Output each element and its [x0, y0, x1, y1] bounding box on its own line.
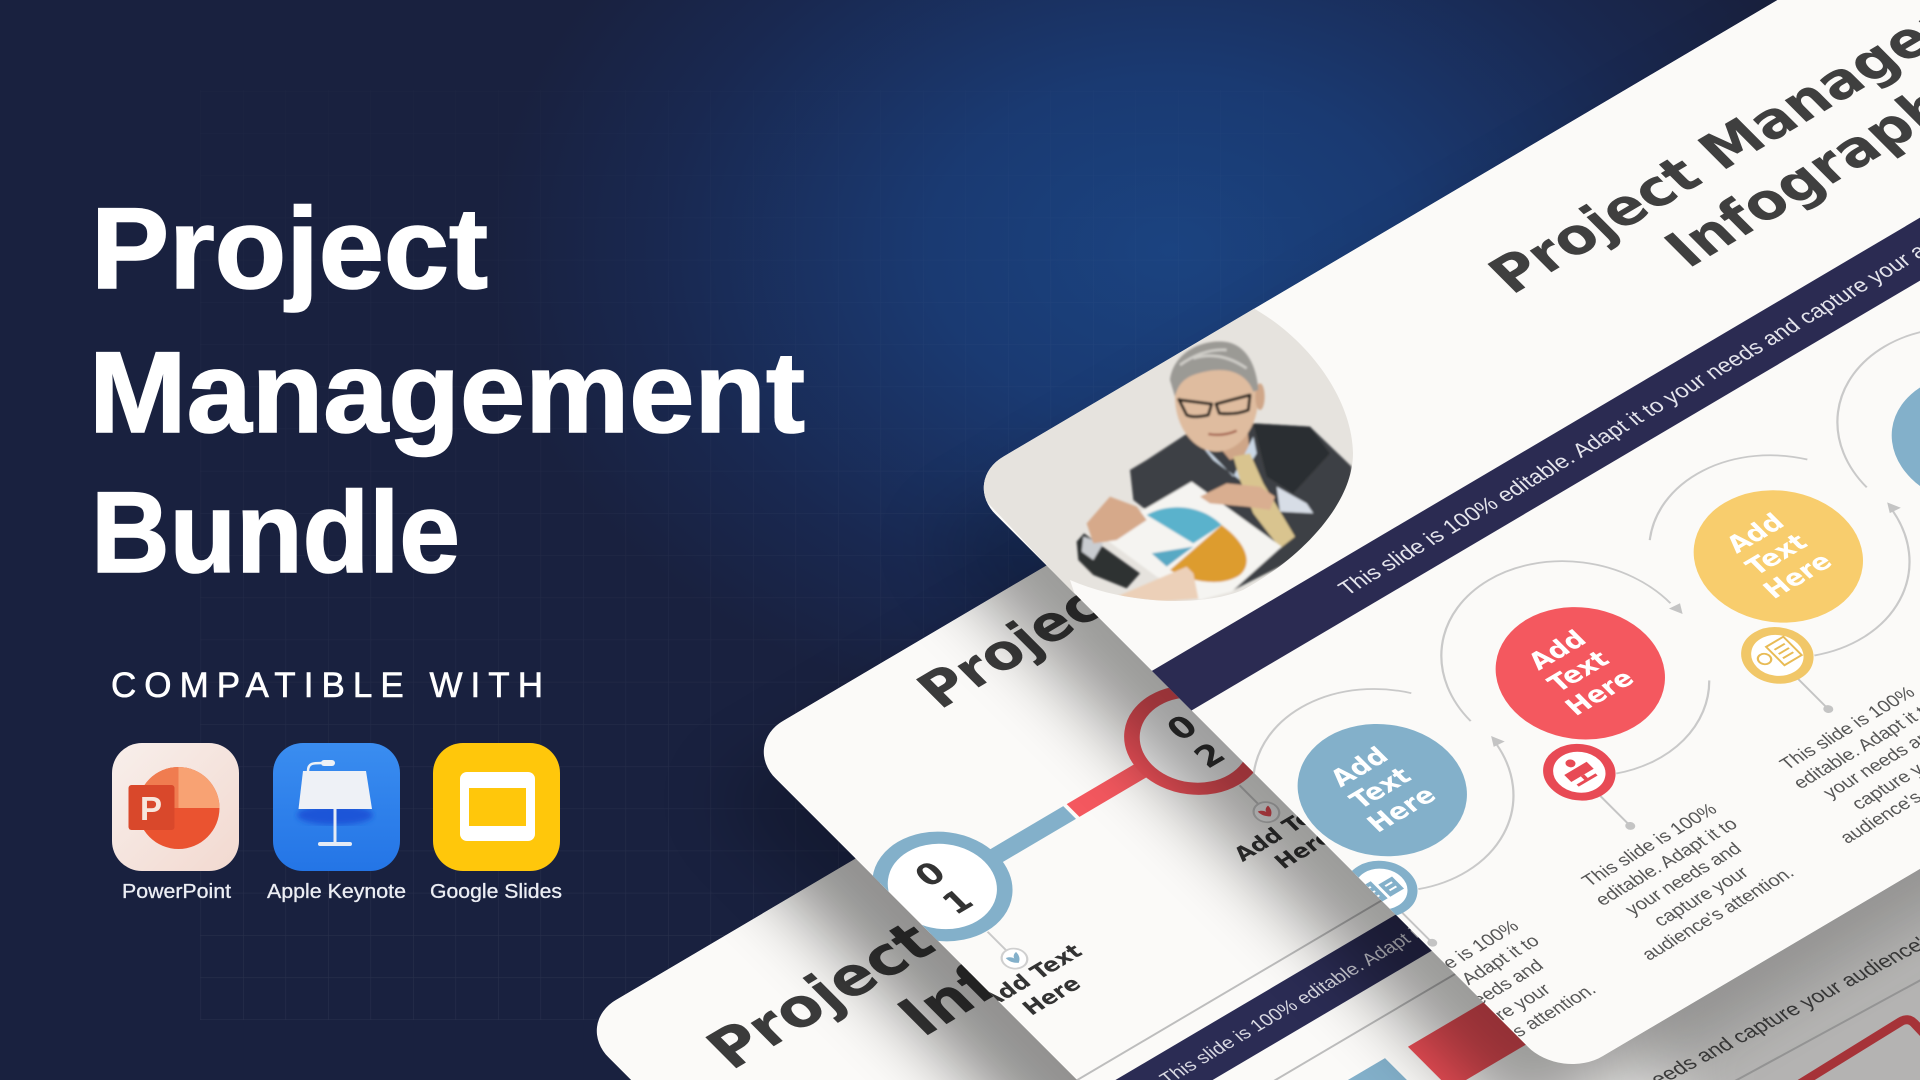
step 3: yellow: Add	[1720, 509, 1791, 559]
step 2: red	[1440, 560, 1794, 960]
back slide title: Infographics	[884, 784, 1298, 1049]
panel: back slide	[596, 858, 1077, 1080]
timeline node 01: Here	[1018, 973, 1087, 1020]
step 1: blue: This slide is 100%	[1379, 916, 1523, 1007]
back slide title: Project Management	[693, 675, 1347, 1080]
timeline node 02: 2	[1186, 736, 1233, 775]
panel: middle slide	[764, 566, 1920, 1080]
step 2: red: audience's attention.	[1637, 863, 1798, 964]
timeline node 01: 0	[906, 854, 954, 894]
red frame	[1790, 1020, 1920, 1080]
step 3: yellow: Text	[1740, 529, 1814, 581]
timeline node 02: Here	[1270, 826, 1339, 874]
step 1: blue: your needs and	[1422, 955, 1547, 1035]
step 2: red: your needs and	[1620, 839, 1746, 919]
icon labels: Apple Keynote	[267, 881, 406, 903]
icon labels: Google Slides	[430, 881, 562, 903]
icon: PowerPoint: P	[140, 790, 162, 827]
step 3: yellow	[1648, 454, 1920, 843]
back slide title	[705, 926, 994, 1068]
title	[89, 185, 805, 597]
step 1: blue: audience's attention.	[1439, 979, 1600, 1080]
icon: Google Slides	[433, 743, 560, 871]
step 1: blue: Text	[1344, 763, 1418, 815]
title: Management	[89, 329, 805, 457]
step 2: red: Here	[1559, 665, 1641, 721]
photo: businessman with pie chart	[984, 308, 1353, 601]
step 3: yellow: This slide is 100%	[1775, 682, 1919, 773]
timeline node 01: 1	[934, 882, 981, 921]
step 1: blue	[1252, 688, 1596, 1036]
step 1: blue: capture your	[1451, 979, 1554, 1047]
icon labels	[122, 881, 562, 903]
title: Bundle	[91, 469, 460, 597]
blue block	[1348, 1058, 1407, 1080]
middle slide content	[872, 9, 1920, 1080]
step 1: blue: Add	[1324, 742, 1395, 793]
step 2: red: Add	[1522, 625, 1593, 676]
timeline node 01: Add Text	[977, 940, 1088, 1013]
step 2: red: Text	[1542, 646, 1616, 698]
icon: PowerPoint	[112, 743, 239, 871]
icon: Apple Keynote	[273, 743, 400, 871]
step 3: yellow: Here	[1757, 548, 1839, 605]
middle slide title: Project Management	[904, 347, 1504, 719]
step 1: blue: Here	[1361, 782, 1443, 838]
red block	[1408, 1002, 1526, 1080]
step 1: blue: editable. Adapt it to	[1392, 931, 1543, 1026]
timeline node 02: 0	[1158, 708, 1206, 747]
step 2: red: This slide is 100%	[1577, 799, 1721, 890]
timeline node 02	[1124, 688, 1326, 869]
middle slide band: This slide is 100% editable. Adapt it to your needs and capture your audience's attention.	[1156, 695, 1813, 1080]
title: Project	[91, 185, 488, 313]
timeline node 01	[872, 832, 1083, 1015]
connector	[990, 764, 1146, 862]
compatible with heading: COMPATIBLE WITH	[111, 666, 543, 705]
step 2: red: capture your	[1649, 863, 1753, 930]
panel: front slide	[900, 0, 1920, 1080]
step 2: red: editable. Adapt it to	[1590, 814, 1741, 909]
step 4: blue	[1836, 331, 1920, 488]
icon labels: PowerPoint	[122, 881, 231, 903]
timeline node 02: Add Text	[1229, 794, 1340, 866]
front slide content	[1152, 20, 1920, 1036]
shadow of front slide	[946, 566, 1920, 1080]
